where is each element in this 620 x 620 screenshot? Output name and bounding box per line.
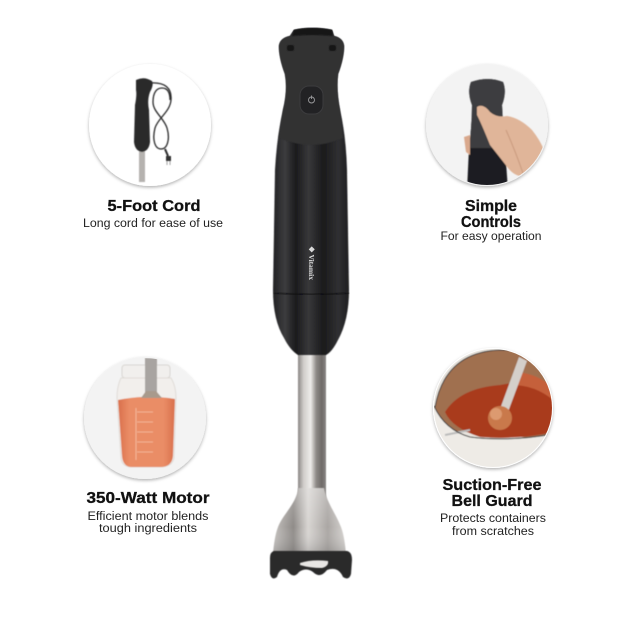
seam xyxy=(274,293,349,294)
heading line 2: Controls xyxy=(461,214,521,231)
steel shaft xyxy=(298,352,326,498)
panel: 350-watt motor xyxy=(84,357,210,535)
photo circle xyxy=(426,64,548,186)
caption line 2: tough ingredients xyxy=(99,521,197,535)
icon: small blender with cord xyxy=(134,78,171,182)
caption: For easy operation xyxy=(440,229,542,243)
motor body xyxy=(273,28,349,355)
heading: 350-Watt Motor xyxy=(86,490,210,507)
heading line 2: Bell Guard xyxy=(452,493,532,510)
photo circle xyxy=(84,357,206,479)
immersion blender product xyxy=(270,28,352,578)
bell guard xyxy=(270,551,352,578)
photo circle xyxy=(89,64,211,186)
blending bell xyxy=(273,488,346,553)
top cap xyxy=(292,28,333,36)
image: jar of juice xyxy=(117,358,176,467)
brand label: ❖ Vitamix xyxy=(307,246,316,280)
power button xyxy=(300,86,323,114)
heading: 5-Foot Cord xyxy=(108,198,200,215)
power icon xyxy=(308,96,314,103)
image: hand on blender xyxy=(464,79,544,190)
caption: Protects containers xyxy=(440,511,546,525)
panel: simple controls xyxy=(426,64,548,243)
blade slot xyxy=(300,560,328,568)
shoulder dots xyxy=(287,45,336,51)
photo circle xyxy=(433,348,553,468)
panel: 5-foot cord xyxy=(83,64,223,230)
image: pot of sauce xyxy=(433,348,553,470)
caption line 2: from scratches xyxy=(452,524,534,538)
caption: Long cord for ease of use xyxy=(83,216,223,230)
heading: Simple xyxy=(465,198,517,215)
panel: suction-free bell guard xyxy=(433,348,553,538)
caption: Efficient motor blends xyxy=(88,509,208,523)
heading: Suction-Free xyxy=(442,477,542,494)
rubber grip xyxy=(279,28,344,145)
